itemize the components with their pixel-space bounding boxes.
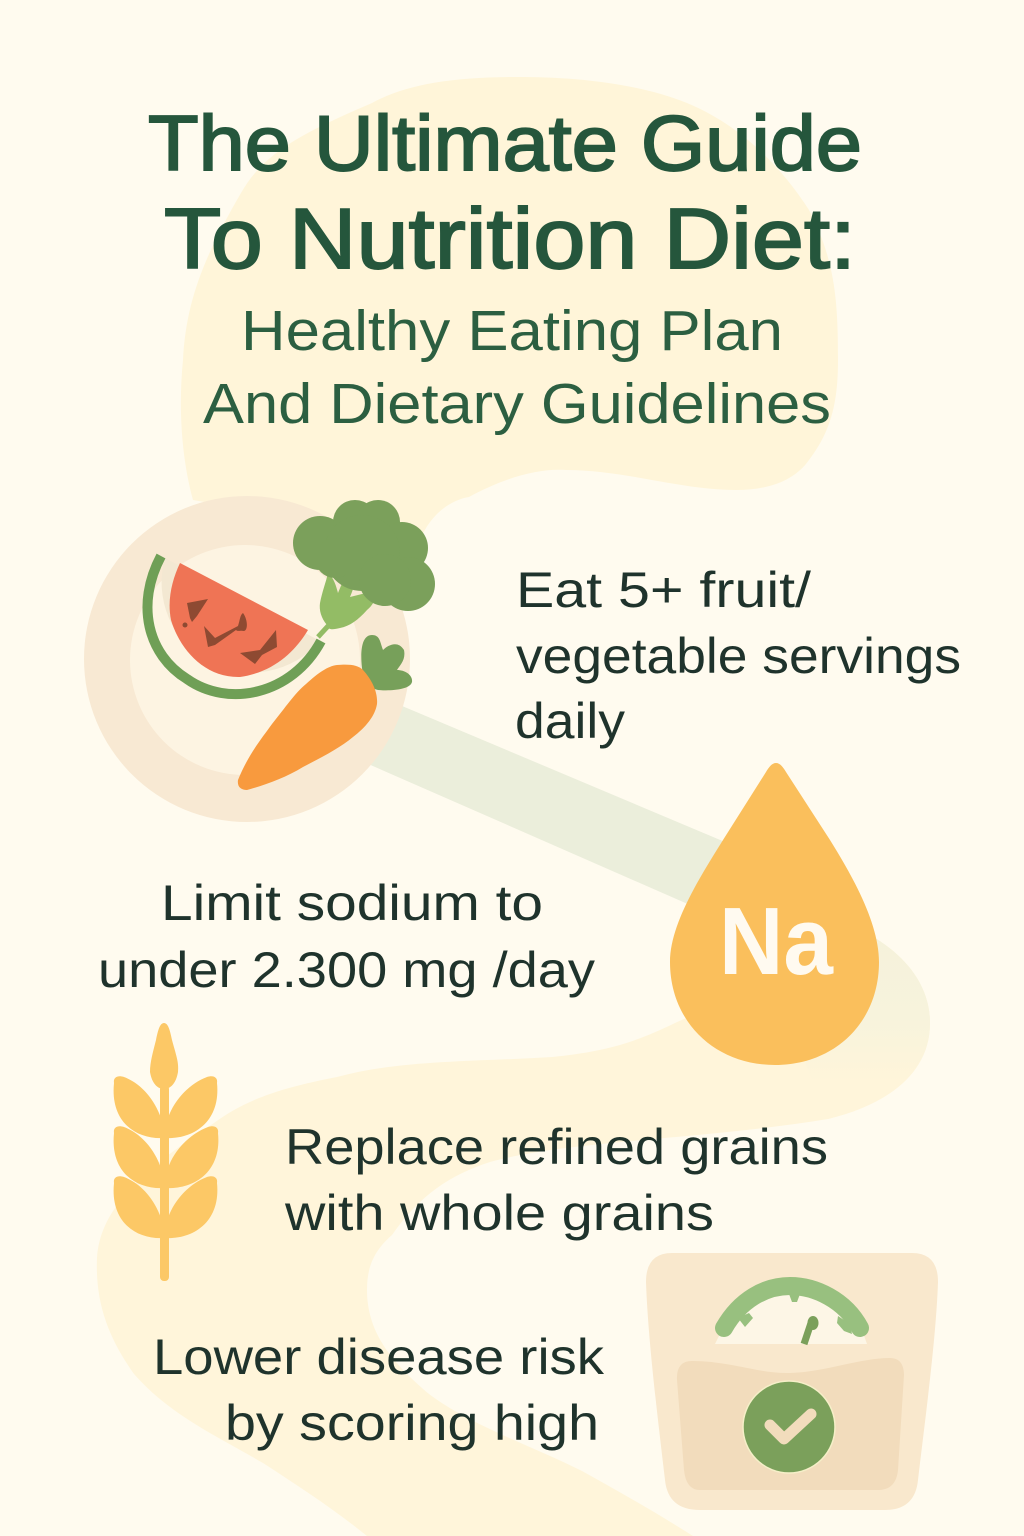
carrot — [238, 635, 412, 790]
connector band from plate to sodium drop — [366, 703, 725, 905]
broccoli — [293, 500, 435, 637]
text: fruit and vegetable servings: Eat 5+ fruit/ — [516, 562, 811, 618]
text: limit sodium: Limit sodium to — [161, 875, 543, 931]
subtitle — [203, 299, 831, 436]
check badge — [743, 1381, 835, 1473]
tinted ribbon lobe beside drop — [800, 935, 930, 1119]
title: To Nutrition Diet: — [164, 192, 856, 287]
text: replace refined grains: Replace refined grains — [285, 1119, 828, 1175]
icon: wheat — [114, 1023, 218, 1281]
scale platform — [677, 1358, 904, 1490]
text: lower disease risk — [153, 1329, 605, 1451]
plate — [84, 496, 410, 822]
scale body — [646, 1253, 938, 1510]
text: lower disease risk: Lower disease risk — [153, 1329, 605, 1385]
subtitle: And Dietary Guidelines — [203, 372, 831, 436]
background blob behind title — [181, 77, 838, 540]
text: fruit and vegetable servings: vegetable servings — [516, 628, 961, 684]
icon: weighing scale with check mark — [646, 1253, 938, 1510]
title — [148, 99, 862, 287]
icon: sodium drop: Na — [719, 888, 834, 995]
text: fruit and vegetable servings: daily — [515, 693, 625, 749]
text: limit sodium: under 2.300 mg /day — [98, 942, 595, 998]
text: limit sodium — [98, 875, 595, 998]
subtitle: Healthy Eating Plan — [241, 299, 783, 363]
icon: sodium drop — [670, 763, 879, 1065]
text: replace refined grains — [284, 1119, 828, 1241]
text: replace refined grains: with whole grains — [284, 1185, 714, 1241]
title: The Ultimate Guide — [148, 99, 862, 187]
text: lower disease risk: by scoring high — [225, 1395, 599, 1451]
watermelon slice — [147, 556, 321, 694]
background ribbon lower — [97, 935, 930, 1536]
text: fruit and vegetable servings — [515, 562, 961, 749]
icon: plate with fruit and vegetables — [84, 496, 435, 822]
scale dial — [715, 1286, 867, 1344]
